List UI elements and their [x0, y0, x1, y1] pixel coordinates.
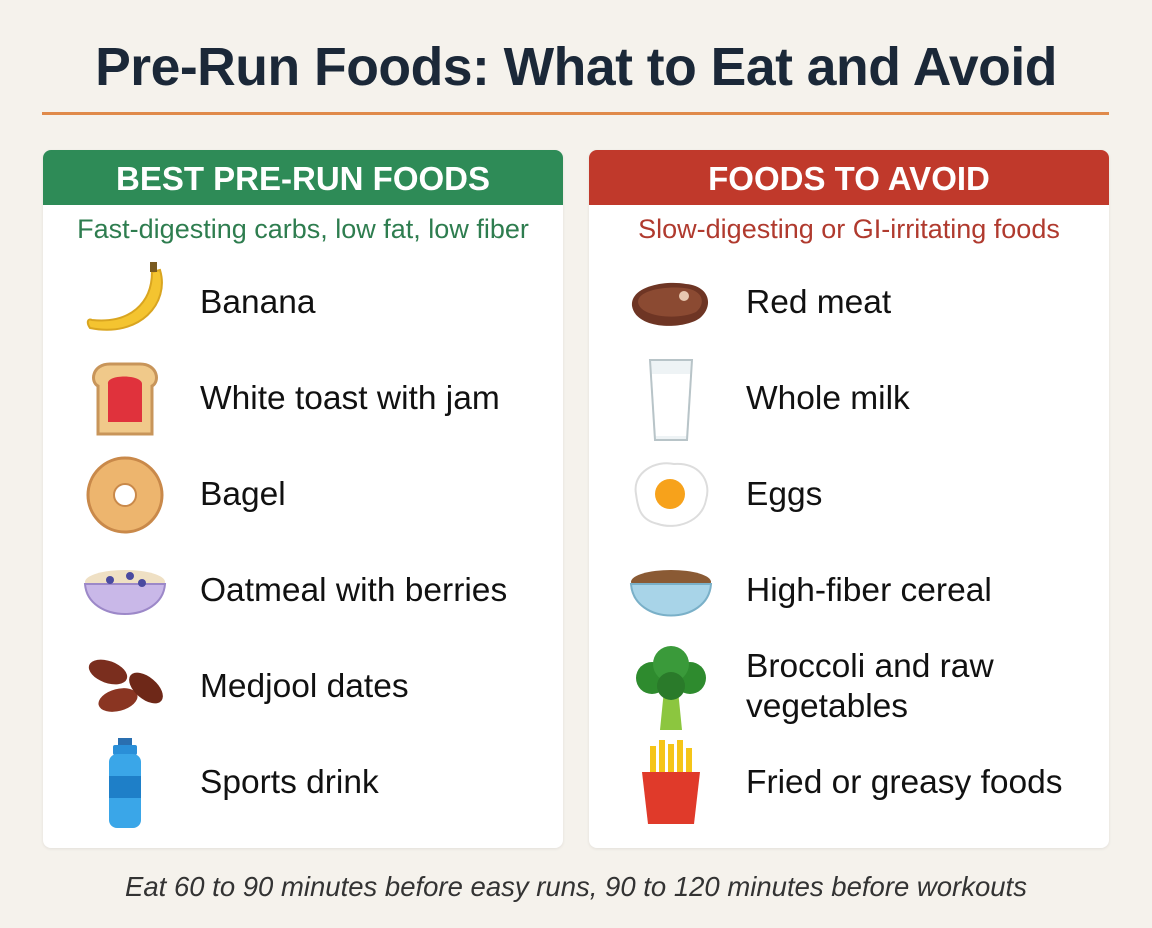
title: Pre-Run Foods: What to Eat and Avoid [95, 38, 1057, 97]
item: broccoli: Broccoli and raw [746, 648, 994, 685]
item: bagel [86, 456, 286, 534]
item: cereal: High-fiber cereal [746, 572, 992, 609]
item: eggs: Eggs [746, 476, 822, 513]
header: avoid: FOODS TO AVOID [708, 160, 990, 197]
header: best: BEST PRE-RUN FOODS [116, 160, 490, 197]
header: best [43, 150, 563, 205]
footer note: Eat 60 to 90 minutes before easy runs, 90 to 120 minutes before workouts [125, 871, 1027, 902]
panel: avoid [589, 150, 1109, 848]
item: milk: Whole milk [746, 380, 910, 417]
item: bagel: Bagel [200, 476, 286, 513]
item: red meat: Red meat [746, 284, 891, 321]
item: fries [642, 740, 1063, 824]
item: dates: Medjool dates [200, 668, 409, 705]
item: oatmeal: Oatmeal with berries [200, 572, 507, 609]
item: cereal [630, 570, 992, 616]
item: sports drink [109, 738, 379, 828]
item: oatmeal [84, 570, 507, 615]
item: broccoli [636, 646, 994, 730]
item: broccoli: vegetables [746, 688, 908, 725]
item: dates [88, 660, 409, 712]
header: avoid [589, 150, 1109, 205]
item: banana [86, 262, 316, 331]
item: toast: White toast with jam [200, 380, 500, 417]
item: fries: Fried or greasy foods [746, 764, 1063, 801]
item: sports drink: Sports drink [200, 764, 379, 801]
item: banana: Banana [200, 284, 316, 321]
subtitle: avoid: Slow-digesting or GI-irritating foods [638, 214, 1060, 244]
item: milk [649, 359, 910, 441]
subtitle: best: Fast-digesting carbs, low fat, low fiber [77, 214, 529, 244]
item: toast [92, 362, 500, 436]
panel: best foods [43, 150, 563, 848]
item: eggs [634, 462, 822, 527]
item: red meat [632, 282, 891, 326]
